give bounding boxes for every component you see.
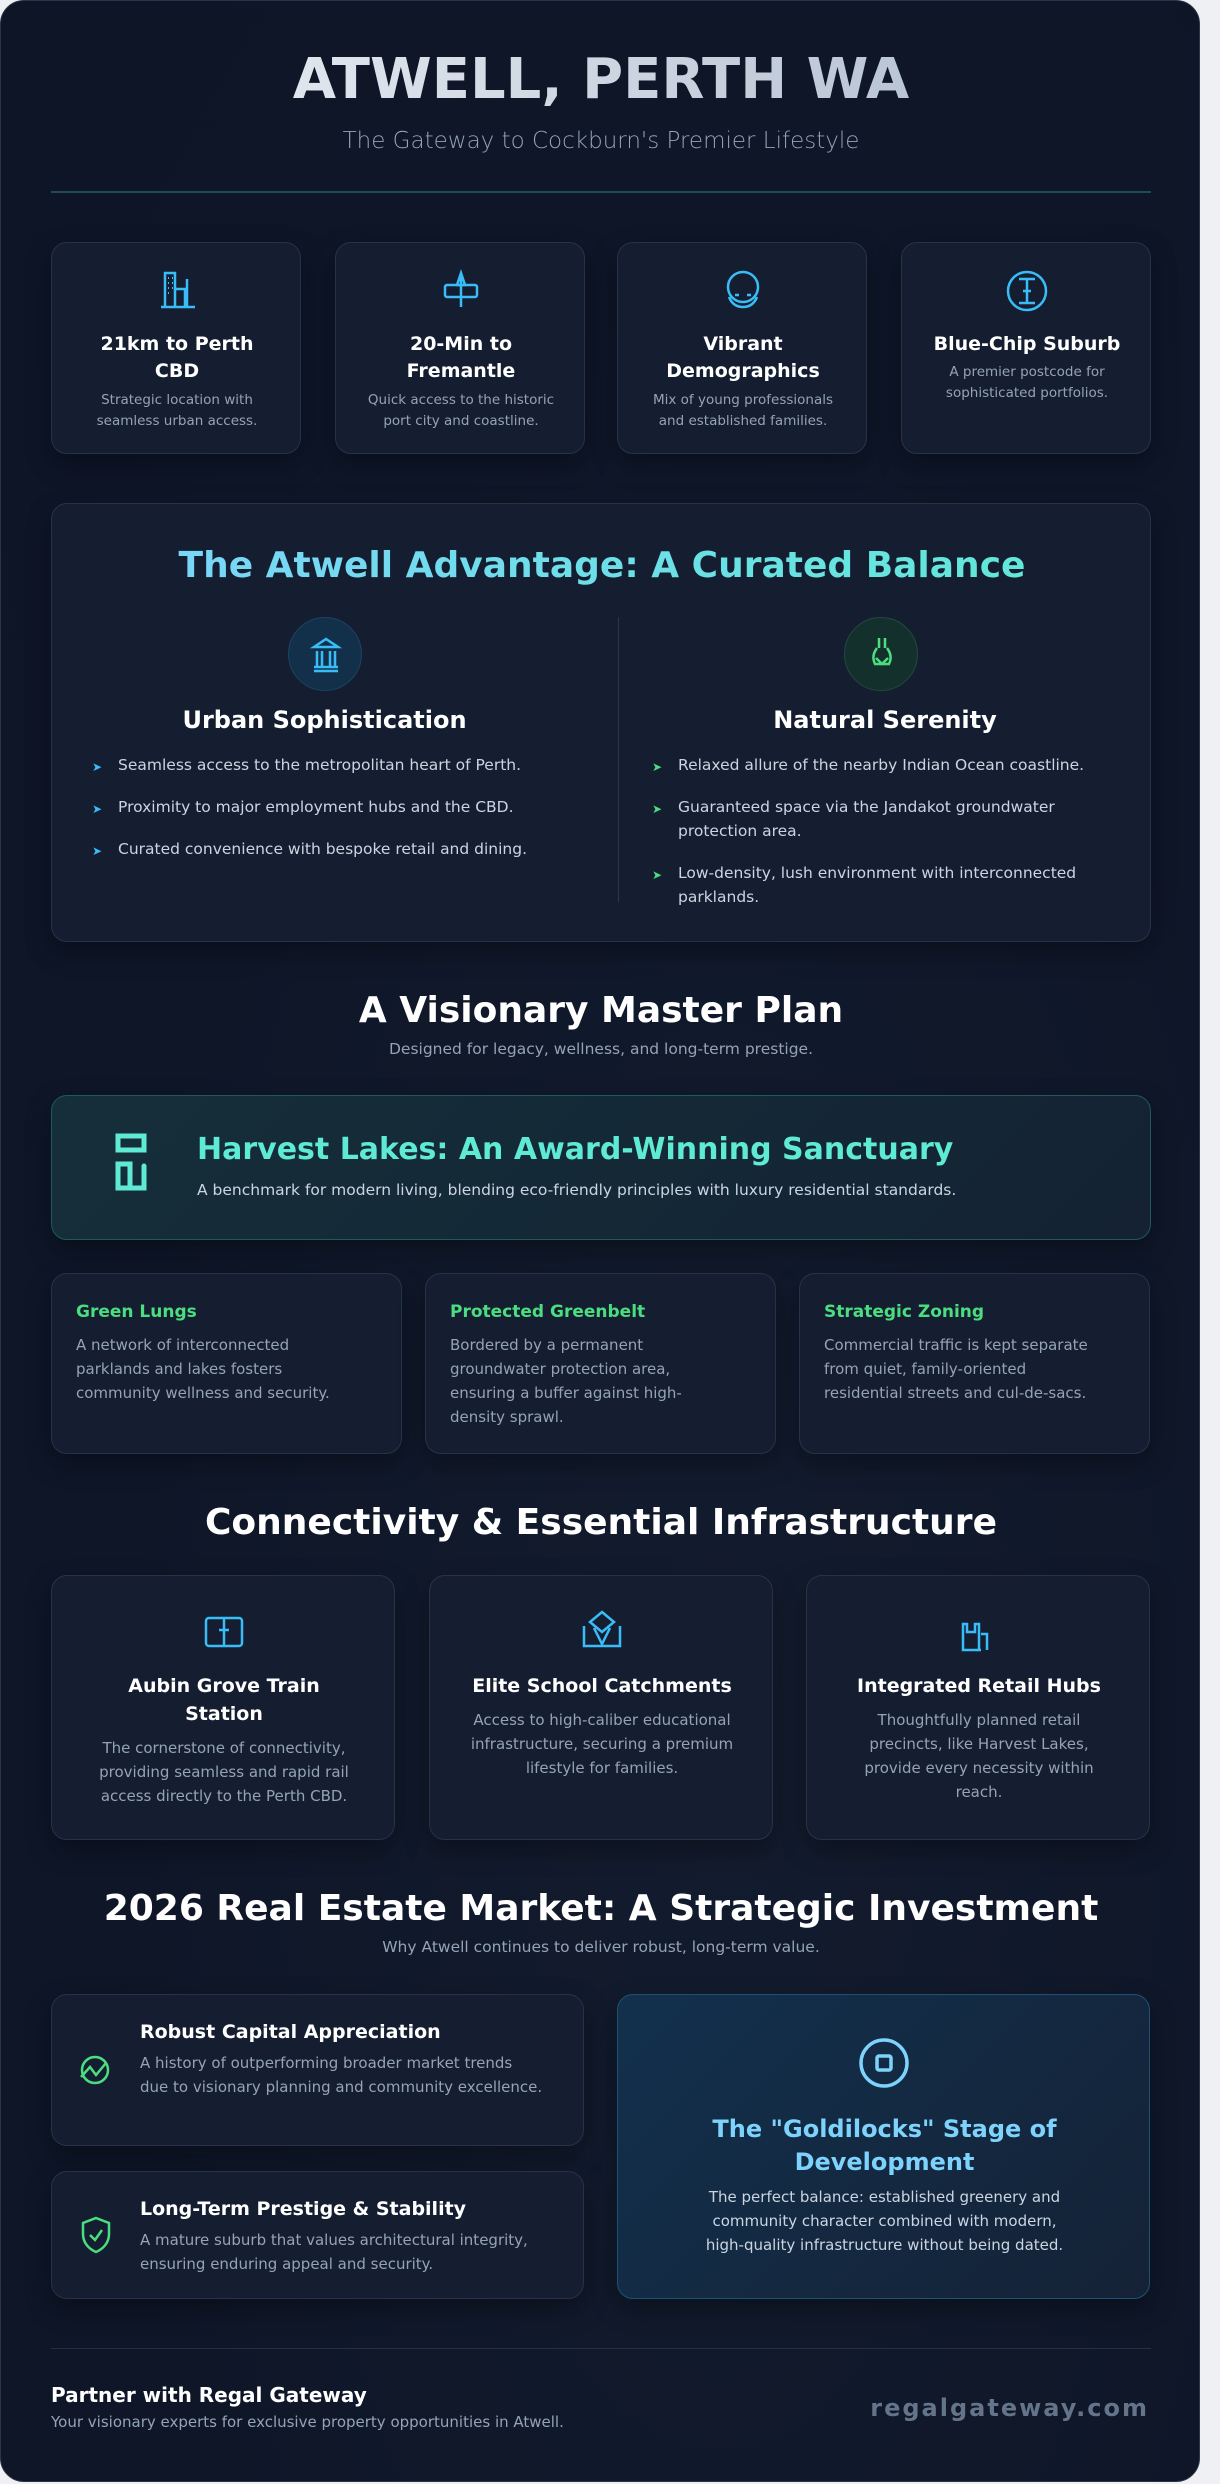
panel: Harvest Lakes: Harvest Lakes: An Award-Winning Sanctuary xyxy=(197,1132,953,1167)
card: Vibrant Demographics: Mix of young professionals xyxy=(653,392,833,408)
card: Vibrant Demographics: Demographics xyxy=(666,360,820,382)
panel: Atwell Advantage xyxy=(51,503,1151,942)
heading xyxy=(52,541,1152,591)
card: Capital Appreciation xyxy=(51,1994,584,2146)
card: Retail xyxy=(806,1575,1150,1840)
column: urban xyxy=(93,617,527,858)
heading: 2026 market: 2026 Real Estate Market: A Strategic Investment xyxy=(104,1888,1098,1929)
title: ATWELL, PERTH WA xyxy=(293,47,909,112)
column: urban: Seamless access to the metropolitan heart of Perth. xyxy=(118,756,521,774)
heading: Connectivity: Connectivity & Essential Infrastructure xyxy=(205,1502,997,1543)
card: Strategic Zoning: Strategic Zoning xyxy=(824,1302,984,1322)
card: Vibrant Demographics xyxy=(617,242,867,454)
title xyxy=(1,43,1201,117)
card: Retail: Thoughtfully planned retail precincts, like Harvest Lakes, provide every necessity within reach. xyxy=(864,1711,1094,1801)
icon: leaf xyxy=(844,617,918,691)
card: Protected Greenbelt: Bordered by a permanent groundwater protection area, ensuring a buffer against high-density sprawl. xyxy=(450,1336,682,1426)
card: 21km to Perth CBD: seamless urban access. xyxy=(97,413,257,429)
panel: Harvest Lakes xyxy=(51,1095,1151,1240)
card: 21km to Perth CBD: 21km to Perth xyxy=(100,333,254,355)
panel: Harvest Lakes: A benchmark for modern living, blending eco-friendly principles with luxury residential standards. xyxy=(197,1181,956,1199)
card: School: Access to high-caliber educational infrastructure, securing a premium lifestyle for families. xyxy=(471,1711,733,1777)
card: 20-Min to Fremantle: Fremantle xyxy=(407,360,515,382)
card: Train Station xyxy=(51,1575,395,1840)
card: Goldilocks: The "Goldilocks" Stage of xyxy=(712,2115,1057,2143)
card: Capital Appreciation: A history of outperforming broader market trends due to visionary planning and community excellence. xyxy=(140,2054,542,2096)
column: natural xyxy=(653,617,1084,906)
icon: train xyxy=(204,1616,244,1648)
card: Goldilocks: Development xyxy=(795,2148,974,2176)
column: urban: Curated convenience with bespoke retail and dining. xyxy=(118,840,527,858)
card: Strategic Zoning xyxy=(799,1273,1150,1454)
card: Train Station: Aubin Grove Train xyxy=(128,1675,320,1697)
card: Prestige: A mature suburb that values architectural integrity, ensuring enduring appeal and security. xyxy=(140,2231,528,2273)
card: Strategic Zoning: Commercial traffic is kept separate from quiet, family-oriented residential streets and cul-de-sacs. xyxy=(824,1336,1088,1402)
card: Vibrant Demographics: Vibrant xyxy=(703,333,783,355)
icon: trend xyxy=(80,2056,110,2084)
card: 21km to Perth CBD xyxy=(51,242,301,454)
column: natural: Relaxed allure of the nearby Indian Ocean coastline. xyxy=(678,756,1084,774)
footer: website: regalgateway.com xyxy=(870,2394,1149,2422)
column: natural: Guaranteed space via the Jandakot groundwater protection area. xyxy=(678,798,1055,840)
icon: award xyxy=(116,1134,146,1190)
card: Train Station: Station xyxy=(185,1703,263,1725)
card: Blue-Chip Suburb: sophisticated portfolios. xyxy=(946,385,1108,401)
card: Green Lungs xyxy=(51,1273,402,1454)
column: urban: Proximity to major employment hubs and the CBD. xyxy=(118,798,514,816)
card: School: Elite School Catchments xyxy=(472,1675,732,1697)
card: Retail: Integrated Retail Hubs xyxy=(857,1675,1101,1697)
heading: Visionary Master Plan: A Visionary Master Plan xyxy=(359,990,843,1031)
card: Goldilocks xyxy=(617,1994,1150,2299)
card: 21km to Perth CBD: CBD xyxy=(155,360,199,382)
card: Prestige: Long-Term Prestige & Stability xyxy=(140,2198,466,2220)
card: Train Station: The cornerstone of connectivity, providing seamless and rapid rail access directly to the Perth CBD. xyxy=(99,1739,349,1805)
card: Capital Appreciation: Robust Capital Appreciation xyxy=(140,2021,441,2043)
card: 20-Min to Fremantle xyxy=(335,242,585,454)
card: Protected Greenbelt: Protected Greenbelt xyxy=(450,1302,645,1322)
column: natural: Natural Serenity xyxy=(773,706,997,734)
card: Prestige xyxy=(51,2171,584,2299)
card: Blue-Chip Suburb: Blue-Chip Suburb xyxy=(934,333,1120,355)
card: Green Lungs: Green Lungs xyxy=(76,1302,197,1322)
card: Blue-Chip Suburb xyxy=(901,242,1151,454)
card: Blue-Chip Suburb: A premier postcode for xyxy=(949,364,1105,380)
icon: shopping xyxy=(962,1622,988,1652)
icon: school xyxy=(582,1610,622,1648)
card: 20-Min to Fremantle: Quick access to the historic xyxy=(368,392,554,408)
icon: face xyxy=(726,270,760,308)
card: Green Lungs: A network of interconnected parklands and lakes fosters community wellness and security. xyxy=(76,1336,330,1402)
icon: shield xyxy=(82,2216,110,2254)
footer: partner: Partner with Regal Gateway xyxy=(51,2383,367,2407)
subheading: Designed for legacy, wellness, and long-term prestige. xyxy=(389,1040,813,1058)
icon: chip circle xyxy=(1006,270,1048,312)
column: natural: Low-density, lush environment with interconnected parklands. xyxy=(678,864,1076,906)
heading: The Atwell Advantage: A Curated Balance xyxy=(179,545,1025,586)
footer: partner xyxy=(51,2383,564,2431)
card: 20-Min to Fremantle: 20-Min to xyxy=(410,333,512,355)
card: School xyxy=(429,1575,773,1840)
column: urban: Urban Sophistication xyxy=(182,706,467,734)
card: Goldilocks: The perfect balance: established greenery and community character combined with modern, high-quality infrastructure without being dated. xyxy=(706,2188,1063,2254)
card: Protected Greenbelt xyxy=(425,1273,776,1454)
footer: partner: Your visionary experts for exclusive property opportunities in Atwell. xyxy=(51,2413,564,2431)
card: 20-Min to Fremantle: port city and coastline. xyxy=(383,413,539,429)
card: 21km to Perth CBD: Strategic location with xyxy=(101,392,253,408)
card: Vibrant Demographics: and established families. xyxy=(659,413,827,429)
icon: bank xyxy=(288,617,362,691)
icon: buildings xyxy=(161,272,195,308)
icon: boat xyxy=(444,269,478,307)
subtitle: The Gateway to Cockburn's Premier Lifestyle xyxy=(343,128,859,154)
icon: target xyxy=(859,2038,909,2088)
subheading: Why Atwell continues to deliver robust, long-term value. xyxy=(382,1938,820,1956)
